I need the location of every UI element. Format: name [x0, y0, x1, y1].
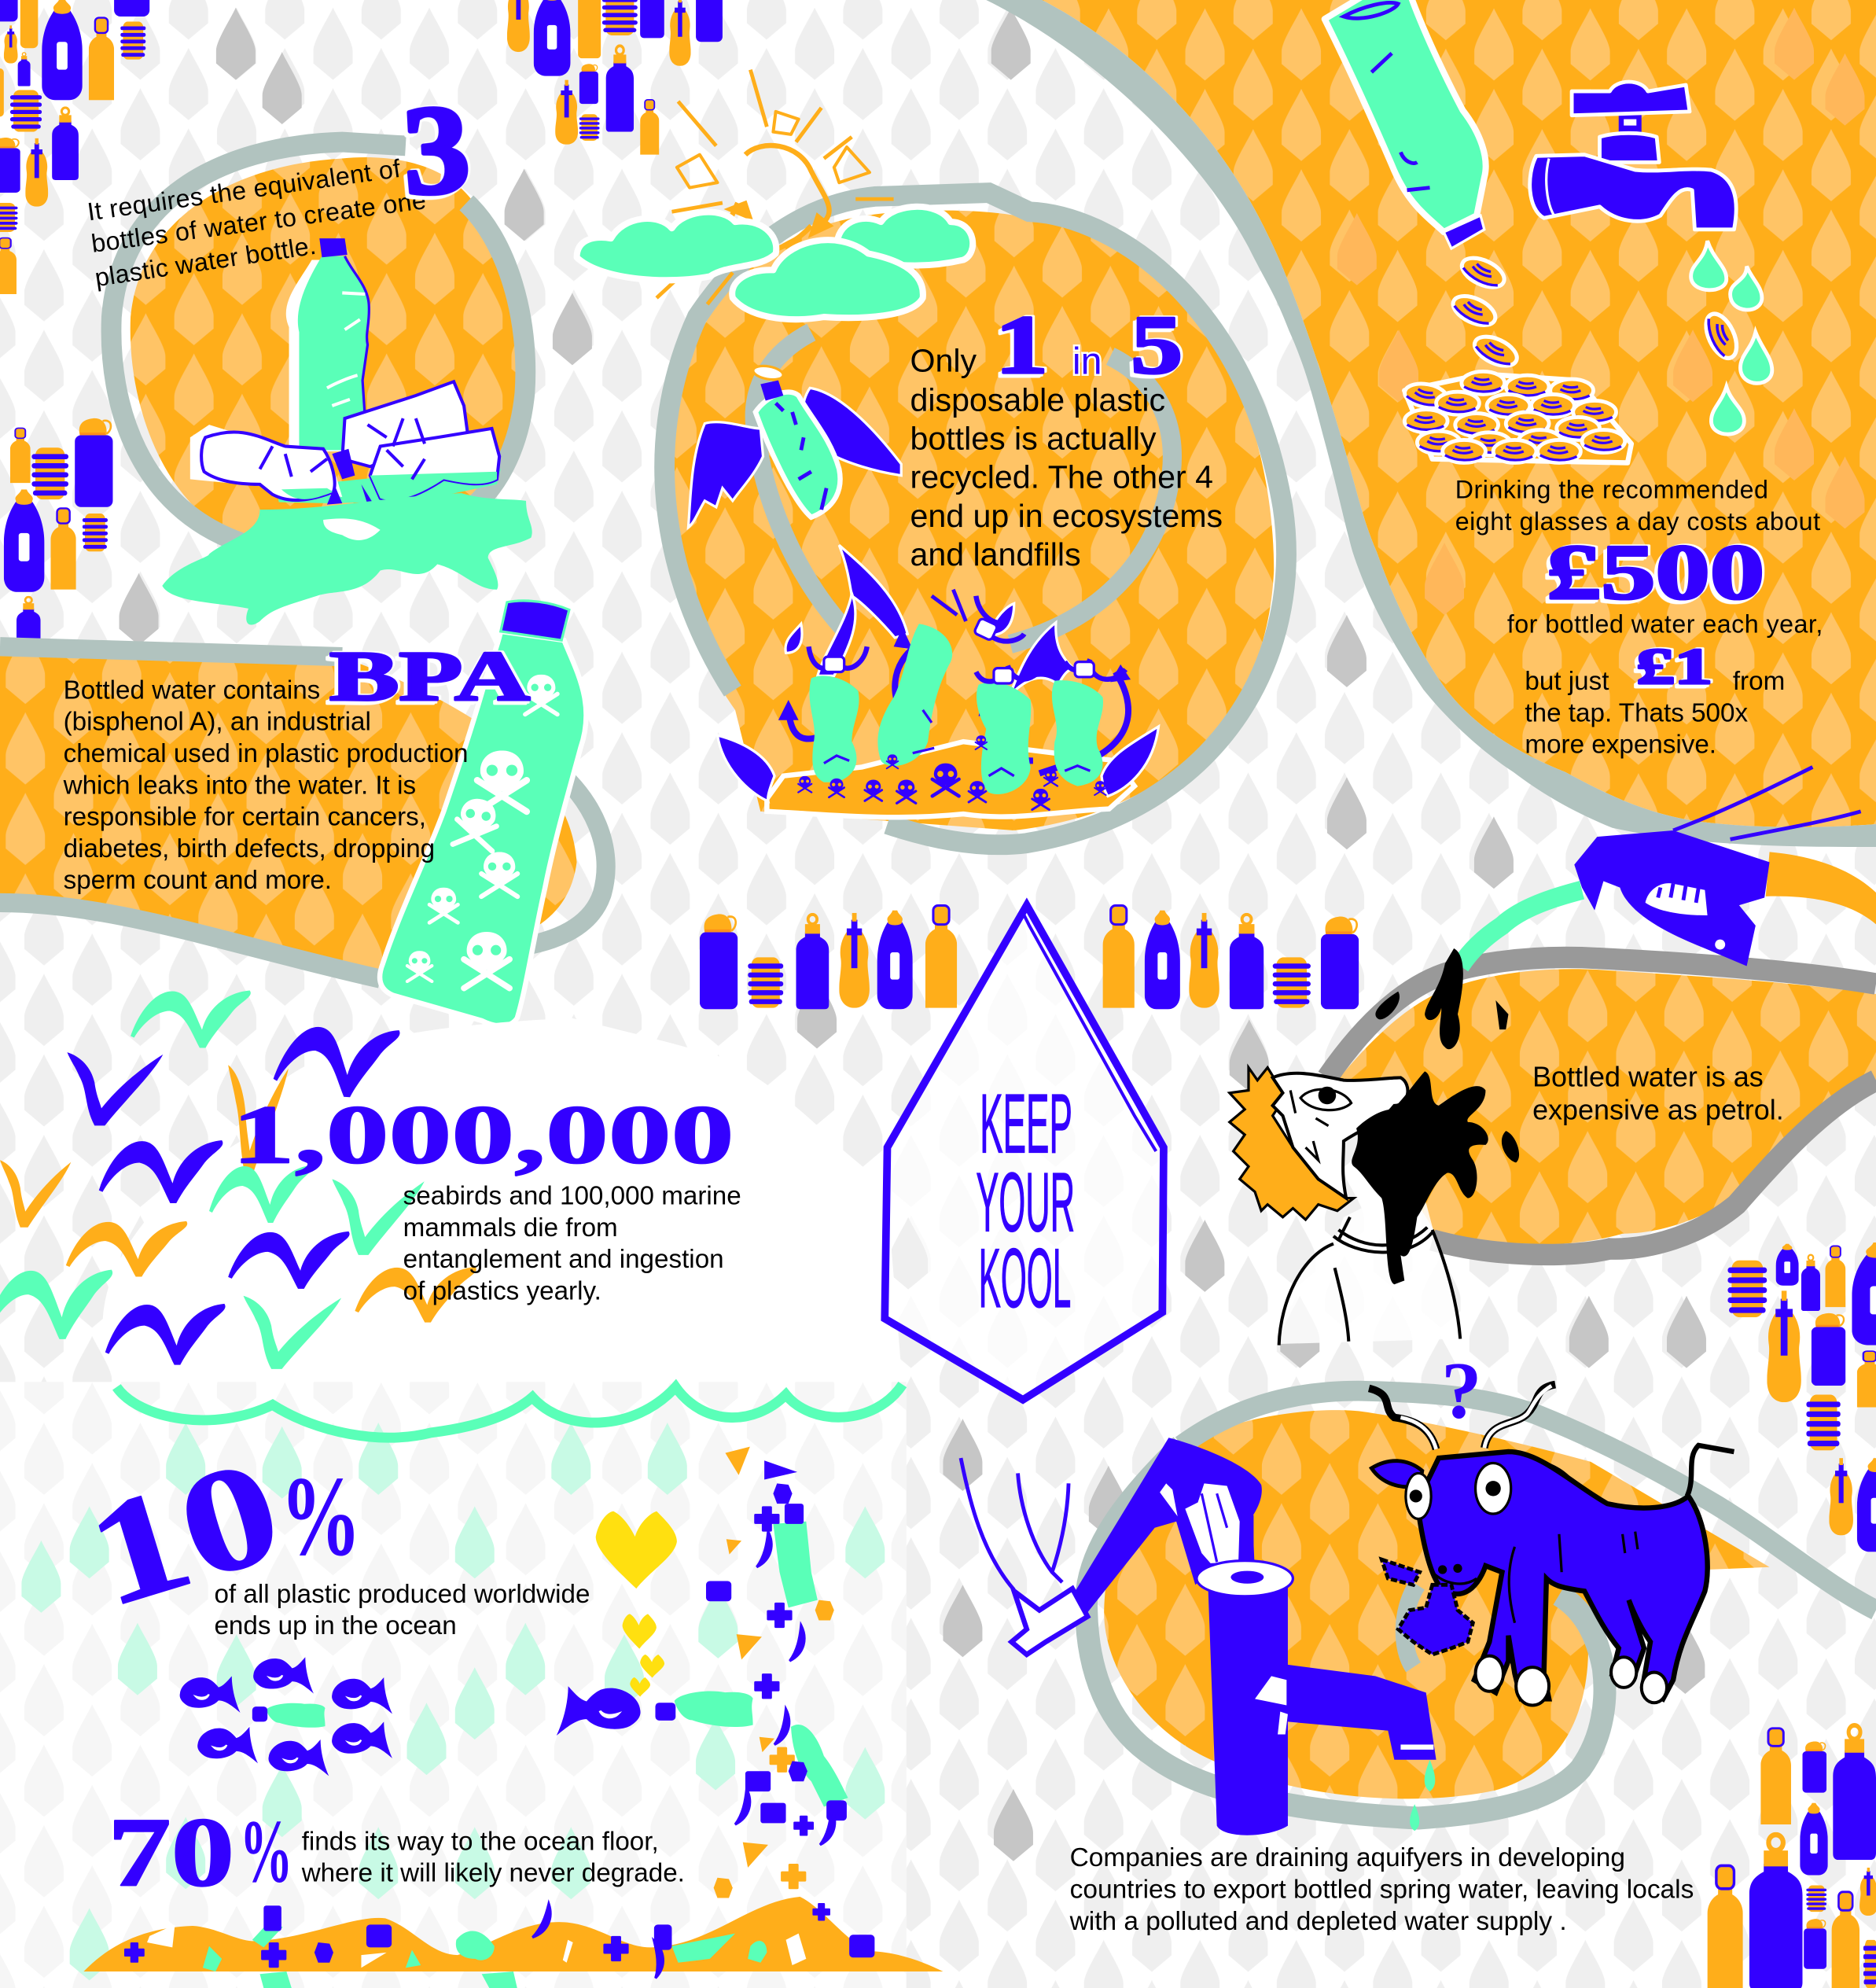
icon: tap [1530, 82, 1736, 230]
skulls on bottle [407, 675, 557, 988]
panel: ocean background [0, 1382, 907, 1988]
icon: crushed bottles [190, 381, 501, 505]
icon: coin pile [1403, 371, 1631, 462]
icon: fish school with bottle [180, 1657, 392, 1776]
stat: 70%: % [240, 1802, 292, 1901]
hair [1230, 1068, 1354, 1220]
stat: 10%: % [280, 1454, 361, 1580]
text: from the tap: from [1733, 667, 1785, 696]
text: drinking eight glasses: eight glasses a day costs about [1455, 507, 1820, 536]
text: only 1 in 5: disposable plastic [910, 381, 1165, 418]
text: for bottled water: for bottled water each year, [1507, 610, 1823, 639]
text: bisphenol A: sperm count and more. [64, 866, 332, 895]
icon: hand on handle [961, 1458, 1087, 1655]
text: of all plastic [214, 1580, 590, 1640]
text: bisphenol A: chemical used in plastic production [64, 739, 469, 768]
illustration: person drinking oil [1230, 948, 1519, 1346]
text: of all plastic: of all plastic produced worldwide [214, 1580, 590, 1609]
stat: 70% [108, 1798, 292, 1907]
panel: top right cost of water [986, 0, 1876, 847]
text: bottled water is as expensive as petrol: Bottled water is as [1532, 1061, 1764, 1093]
text: only 1 in 5: end up in ecosystems [910, 498, 1223, 534]
text: only 1 in 5: recycled. The other 4 [910, 459, 1213, 495]
panel: petrol [1327, 957, 1876, 1254]
bottle row: centre left [700, 906, 957, 1009]
text: bisphenol A: which leaks into the water. It is [63, 771, 416, 800]
text: seabirds and marine mammals: mammals die from [403, 1213, 618, 1242]
panel: keep your kool drop: KEEP [980, 1077, 1072, 1171]
puddle highlight [323, 518, 381, 540]
text: but just: but just [1525, 667, 1609, 696]
text: ocean floor: finds its way to the ocean floor, [302, 1827, 659, 1856]
text: it requires the equivalent of [86, 154, 428, 292]
panel: aquifers [961, 1346, 1876, 1936]
icon: standing bottle [286, 238, 369, 451]
stat: £500: £500 [1547, 528, 1764, 616]
ground [767, 742, 1135, 817]
bottle marks [824, 710, 1090, 776]
icon: clouds [577, 207, 973, 319]
icon: ocean floor debris [83, 1897, 943, 1988]
panel: BPA [0, 601, 606, 1026]
icon: toxic bottle [380, 601, 587, 1026]
text: seabirds and marine mammals: of plastics yearly. [403, 1277, 601, 1306]
text: bisphenol A: (bisphenol A), an industrial [64, 708, 371, 737]
bottle cluster: top left [0, 0, 149, 294]
text: companies draining aquifers: with a polluted and depleted water supply . [1069, 1907, 1567, 1936]
flames [717, 545, 1159, 801]
text: only 1 in 5: 5 [1131, 299, 1183, 392]
bottles [809, 624, 1103, 794]
tails [789, 640, 1128, 773]
icon: tap drops and coin [1691, 241, 1772, 434]
text: companies draining aquifers [1069, 1843, 1694, 1936]
text: only 1 in 5: in [1072, 341, 1102, 383]
text: from the tap: more expensive. [1525, 731, 1716, 760]
stat: BPA: BPA [329, 637, 530, 716]
icon: recycling sun [657, 70, 925, 304]
panel: 1 in 5 recycled [577, 70, 1286, 845]
stat: 10% [71, 1428, 361, 1639]
panel: seabirds [0, 991, 903, 1438]
question mark: ? [1441, 1346, 1482, 1435]
text: bisphenol A: responsible for certain cancers, [64, 803, 426, 832]
devil caps [809, 590, 1126, 683]
darker drops on orange [1337, 8, 1864, 615]
text: only 1 in 5: Only [910, 342, 977, 378]
bottle cluster: bottom right [1708, 1725, 1876, 1988]
stat: £1: £1 [1636, 639, 1712, 694]
text: companies draining aquifers: Companies are draining aquifyers in developing [1070, 1843, 1625, 1872]
bottle cluster: top centre [507, 0, 723, 155]
bottle cluster: left [4, 418, 112, 659]
text: drinking eight glasses: Drinking the recommended [1455, 476, 1768, 504]
text: seabirds and marine mammals: seabirds and 100,000 marine [403, 1182, 741, 1211]
oil drops [1375, 948, 1519, 1162]
text: bottled water is as expensive as petrol: expensive as petrol. [1532, 1094, 1784, 1126]
stat: 70%: 70 [108, 1798, 234, 1907]
text: bisphenol A: diabetes, birth defects, dropping [64, 834, 435, 863]
text: bottled water is as expensive as petrol [1532, 1061, 1784, 1126]
panel: 3 bottles to make one [86, 77, 532, 625]
stat: 1,000,000: 1,000,000 [232, 1088, 734, 1181]
grey band [986, 0, 1876, 847]
icon: falling coins [1448, 252, 1521, 372]
stat: 10%: 10 [71, 1428, 298, 1639]
panel: plastic in ocean [71, 1428, 943, 1988]
neck and body [1280, 1179, 1460, 1344]
panel: keep your kool drop [885, 905, 1164, 1400]
icon: water pump [1074, 1438, 1436, 1835]
birds flock [0, 991, 476, 1369]
bottle cluster: right middle [1727, 1242, 1876, 1552]
mint drops [21, 1423, 885, 1980]
icon: fish and bottle with hearts [557, 1511, 753, 1736]
panel: keep your kool drop: KOOL [979, 1231, 1071, 1325]
debris: falling plastic [706, 1445, 848, 1898]
icon: burning bottles [717, 545, 1159, 817]
text: it requires the equivalent of: It requires the equivalent of [86, 154, 402, 226]
icon: tap drips [1410, 1760, 1435, 1831]
text: companies draining aquifers: countries to export bottled spring water, leaving locals [1070, 1876, 1694, 1905]
darker accent drops [120, 8, 1706, 1861]
icon: petrol pump nozzle [1460, 767, 1876, 966]
text: only 1 in 5 [910, 299, 1223, 572]
waves [116, 1385, 903, 1438]
text: ocean floor [301, 1827, 685, 1888]
text: ocean floor: where it will likely never degrade. [301, 1859, 685, 1888]
text: seabirds and marine mammals: entanglement and ingestion [403, 1245, 724, 1274]
icon: puddle [162, 493, 532, 625]
skulls on ground [798, 735, 1106, 810]
stat: 3: 3 [399, 77, 473, 222]
icon: angel bottle [688, 364, 901, 528]
text: it requires the equivalent of: plastic water bottle. [93, 231, 318, 292]
text: only 1 in 5: 1 [995, 299, 1048, 392]
white area behind seabirds [103, 1018, 903, 1385]
icon: pouring bottle [1325, 0, 1486, 248]
icon: goat [1369, 1385, 1734, 1705]
text: bisphenol A [63, 676, 469, 895]
oil splat [1352, 1071, 1488, 1284]
bottle row: centre right [1103, 906, 1359, 1009]
text: bisphenol A: Bottled water contains [64, 676, 320, 705]
panel: keep your kool drop: YOUR [976, 1155, 1075, 1249]
eye and mouth [1290, 1089, 1352, 1160]
text: of all plastic: ends up in the ocean [214, 1611, 457, 1640]
text: from the tap [1525, 667, 1785, 760]
text: only 1 in 5: and landfills [910, 536, 1081, 572]
text: it requires the equivalent of: bottles of water to create one [90, 186, 428, 258]
text: from the tap: the tap. Thats 500x [1525, 698, 1748, 727]
face [1273, 1073, 1407, 1198]
text: only 1 in 5: bottles is actually [910, 421, 1157, 457]
text: drinking eight glasses [1455, 476, 1820, 536]
heading: keep your kool [976, 1077, 1075, 1325]
text: seabirds and marine mammals [403, 1182, 741, 1306]
